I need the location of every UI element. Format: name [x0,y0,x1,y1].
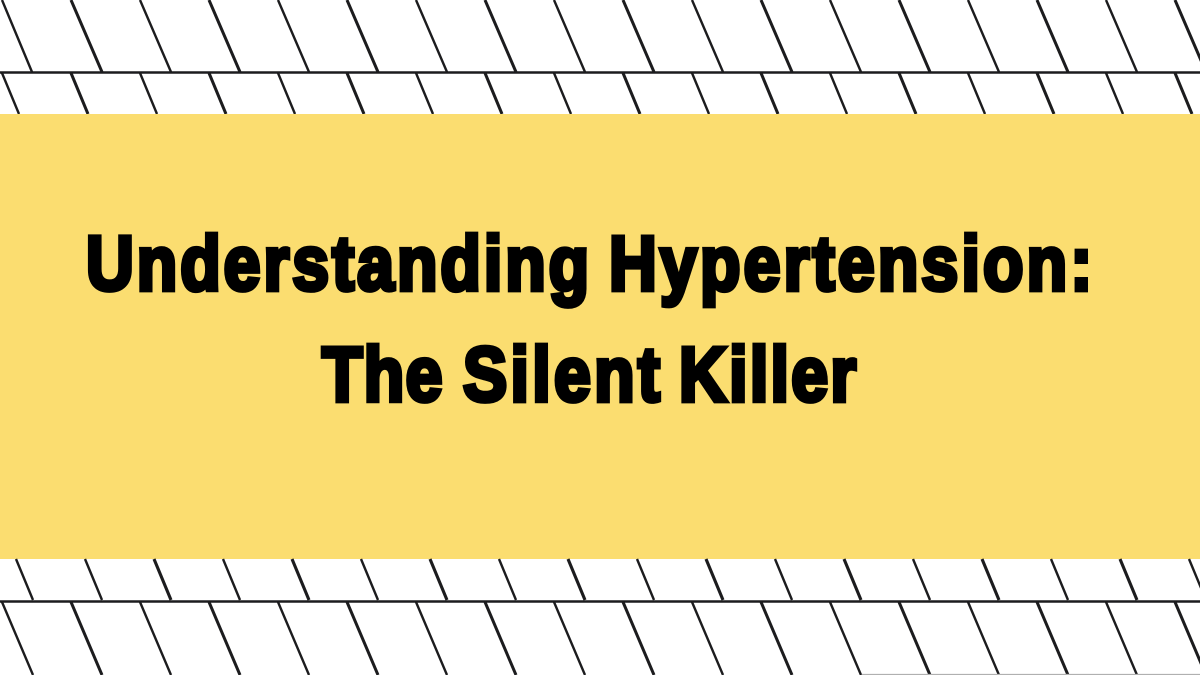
title [86,221,1092,418]
title: The [322,332,442,418]
title: Killer [679,332,856,418]
top hatched border band [0,0,1200,114]
title: Hypertension: [609,221,1092,307]
yellow title panel [0,114,1200,559]
title: Understanding [86,221,589,307]
bottom hatched border band [0,559,1200,675]
title: Silent [463,332,660,418]
